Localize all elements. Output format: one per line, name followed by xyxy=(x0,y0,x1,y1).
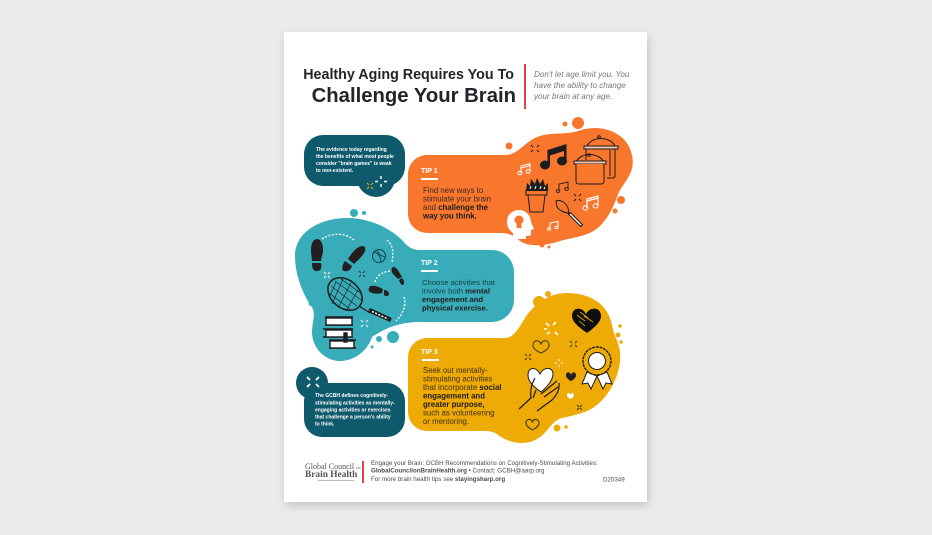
icon: pots xyxy=(574,136,618,184)
icon: books xyxy=(323,317,356,348)
tip 2 text: engagement and xyxy=(422,295,483,304)
tip 1 text: way you think. xyxy=(422,212,477,220)
title: Healthy Aging Requires You To xyxy=(303,67,514,83)
tip 1 text: Find new ways to xyxy=(423,186,484,195)
decorative dots xyxy=(306,209,399,348)
title: Challenge Your Brain xyxy=(312,85,516,107)
sparkles xyxy=(324,272,368,327)
callout: brain games: the benefits of what most people xyxy=(316,154,394,160)
sparkles xyxy=(544,322,558,335)
callout: brain games xyxy=(304,135,405,197)
icon: handshake heart xyxy=(572,309,601,333)
tip 1 text xyxy=(422,186,491,220)
icon: solid hearts xyxy=(566,372,576,381)
tip 2 text xyxy=(422,278,496,312)
logo: Global Council on Brain Health: Global Council on xyxy=(305,462,361,471)
tip 1 label: TIP 1 xyxy=(421,168,438,175)
decorative dots xyxy=(533,291,623,432)
callout: GCBH definition: The GCBH defines cognitively- xyxy=(315,393,388,399)
tip 3 label: TIP 3 xyxy=(421,349,438,356)
logo: Global Council on Brain Health xyxy=(305,462,361,481)
decorative dots xyxy=(506,117,625,248)
tip 2 text: involve both mental xyxy=(422,286,490,296)
tip 2 label: TIP 2 xyxy=(421,260,438,267)
icon: hand holding heart xyxy=(519,368,559,411)
footer text: D20349 xyxy=(603,476,625,484)
icon: ball xyxy=(372,250,386,262)
panel: tip 3 xyxy=(408,291,623,443)
icon: plant pot xyxy=(526,178,548,212)
callout: GCBH definition: engaging activities or exercises xyxy=(315,408,391,414)
tip 1 text: stimulate your brain xyxy=(423,194,491,204)
title xyxy=(303,67,516,107)
page sheet xyxy=(284,32,647,502)
logo: Global Council on Brain Health: Brain Health xyxy=(305,470,358,480)
panel: tip 2 xyxy=(295,209,514,361)
tip 2 text: Choose activities that xyxy=(422,278,496,287)
footer text: For more brain health tips see stayingsharp.org xyxy=(371,476,505,483)
subtitle: have the ability to change xyxy=(534,81,626,90)
page shadow xyxy=(286,36,648,505)
subtitle: your brain at any age. xyxy=(533,92,612,101)
tip 3 text: stimulating activities xyxy=(423,374,492,384)
icon: large music note xyxy=(540,144,567,170)
callout: brain games: The evidence today regarding xyxy=(316,147,387,153)
footer divider xyxy=(362,461,364,483)
tip 3 text: such as volunteering xyxy=(423,408,495,418)
callout: GCBH definition: to think. xyxy=(315,422,335,428)
tip 3 text xyxy=(423,366,501,426)
icon: small music notes xyxy=(518,164,598,230)
sparkles xyxy=(531,145,581,201)
title divider xyxy=(524,64,526,109)
subtitle: Don't let age limit you. You xyxy=(534,70,630,79)
callout: brain games: consider "brain games" is weak xyxy=(316,161,392,167)
icon: dashed arrows xyxy=(322,234,405,321)
tip 3 text: or mentoring. xyxy=(423,417,469,426)
callout: GCBH definition: stimulating activities as mentally- xyxy=(315,400,395,406)
subtitle xyxy=(533,70,630,101)
tip 3 text: greater purpose, xyxy=(423,400,485,409)
icon: head with lightbulb xyxy=(507,210,534,239)
footer text: GlobalCouncilonBrainHealth.org • Contact: GCBH@aarp.org xyxy=(371,468,545,474)
page content xyxy=(295,64,633,484)
tip 3 text: engagement and xyxy=(423,392,485,400)
icon: outline hearts xyxy=(526,341,549,430)
callout: GCBH definition: that challenge a person's ability xyxy=(315,414,391,420)
icon: tennis racket xyxy=(321,271,391,320)
tip 2 text: physical exercise. xyxy=(422,304,488,312)
callout: brain games: to non-existent. xyxy=(316,168,354,174)
footer text xyxy=(371,460,625,484)
tip 3 text: Seek out mentally- xyxy=(423,366,488,375)
callout: GCBH definition xyxy=(296,367,405,437)
panel: tip 1 xyxy=(408,117,633,248)
icon: trowel xyxy=(556,200,582,226)
icon: ribbon rosette xyxy=(582,347,612,389)
tip 3 text: that incorporate social xyxy=(423,383,501,392)
footer text: Engage your Brain: GCBH Recommendations on Cognitively-Stimulating Activities: xyxy=(371,460,598,467)
tip 1 text: and challenge the xyxy=(423,203,489,212)
icon: footprints xyxy=(311,239,404,296)
